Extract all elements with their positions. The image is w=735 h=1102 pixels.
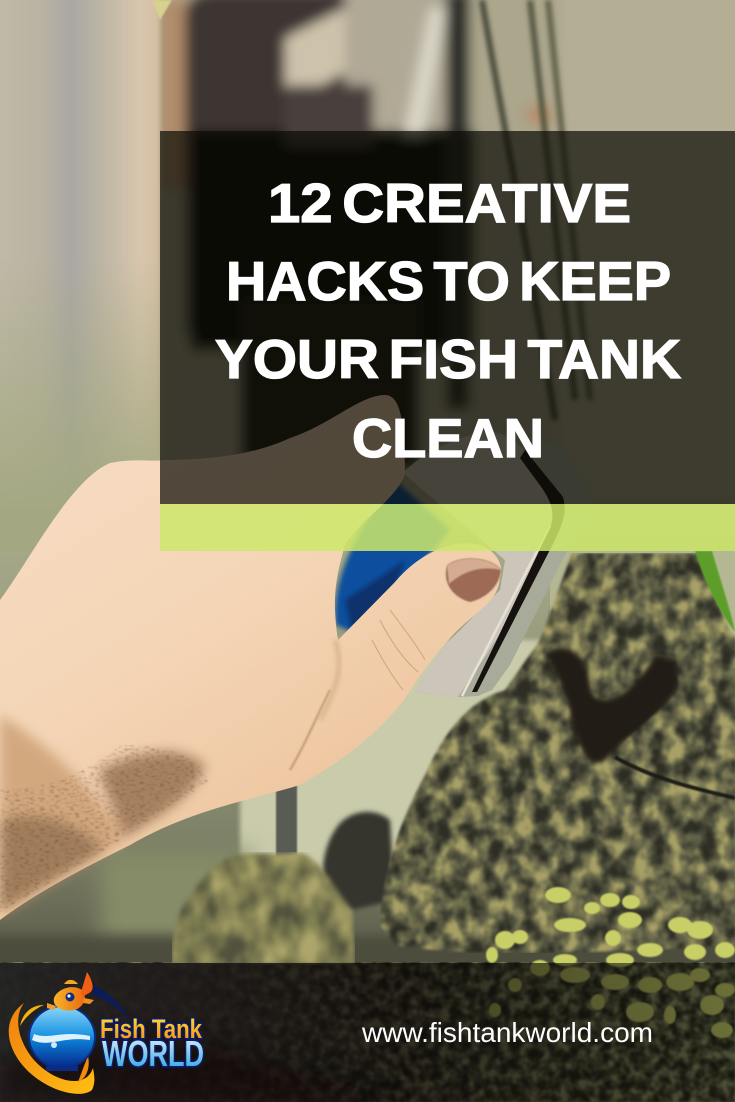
wrist hair xyxy=(0,745,210,912)
title: YOUR FISH TANK xyxy=(215,328,681,390)
logo ring xyxy=(9,1003,94,1094)
hand xyxy=(0,395,501,920)
title xyxy=(215,172,681,469)
logo wordmark: WORLD xyxy=(102,1033,204,1074)
title: HACKS TO KEEP xyxy=(226,250,671,312)
logo fishbowl xyxy=(28,1005,96,1071)
logo: Fish Tank World xyxy=(9,972,204,1094)
title: CLEAN xyxy=(352,407,544,469)
ground blur xyxy=(0,935,735,995)
website url: www.fishtankworld.com xyxy=(361,1017,653,1048)
logo wordmark xyxy=(100,1014,204,1074)
logo fish xyxy=(47,972,94,1010)
left panel xyxy=(0,0,172,551)
gravel xyxy=(0,962,735,1102)
title: 12 CREATIVE xyxy=(268,172,631,234)
wrist shading xyxy=(0,715,205,915)
large rocks xyxy=(380,553,735,953)
scraper and blue handle xyxy=(334,432,567,697)
thumb nail xyxy=(446,559,501,602)
dark rock xyxy=(323,812,395,915)
lime band xyxy=(160,504,735,551)
upper tank background xyxy=(160,0,735,470)
logo swoosh xyxy=(92,985,130,1020)
title panel xyxy=(160,131,735,504)
footer strip xyxy=(0,963,735,1102)
footer low shadow xyxy=(0,1034,360,1102)
logo wordmark: Fish Tank xyxy=(100,1014,203,1044)
foreground plants xyxy=(486,887,735,1038)
green plant top right xyxy=(695,551,735,632)
lower tank wall xyxy=(0,551,735,971)
small rock xyxy=(172,852,355,965)
